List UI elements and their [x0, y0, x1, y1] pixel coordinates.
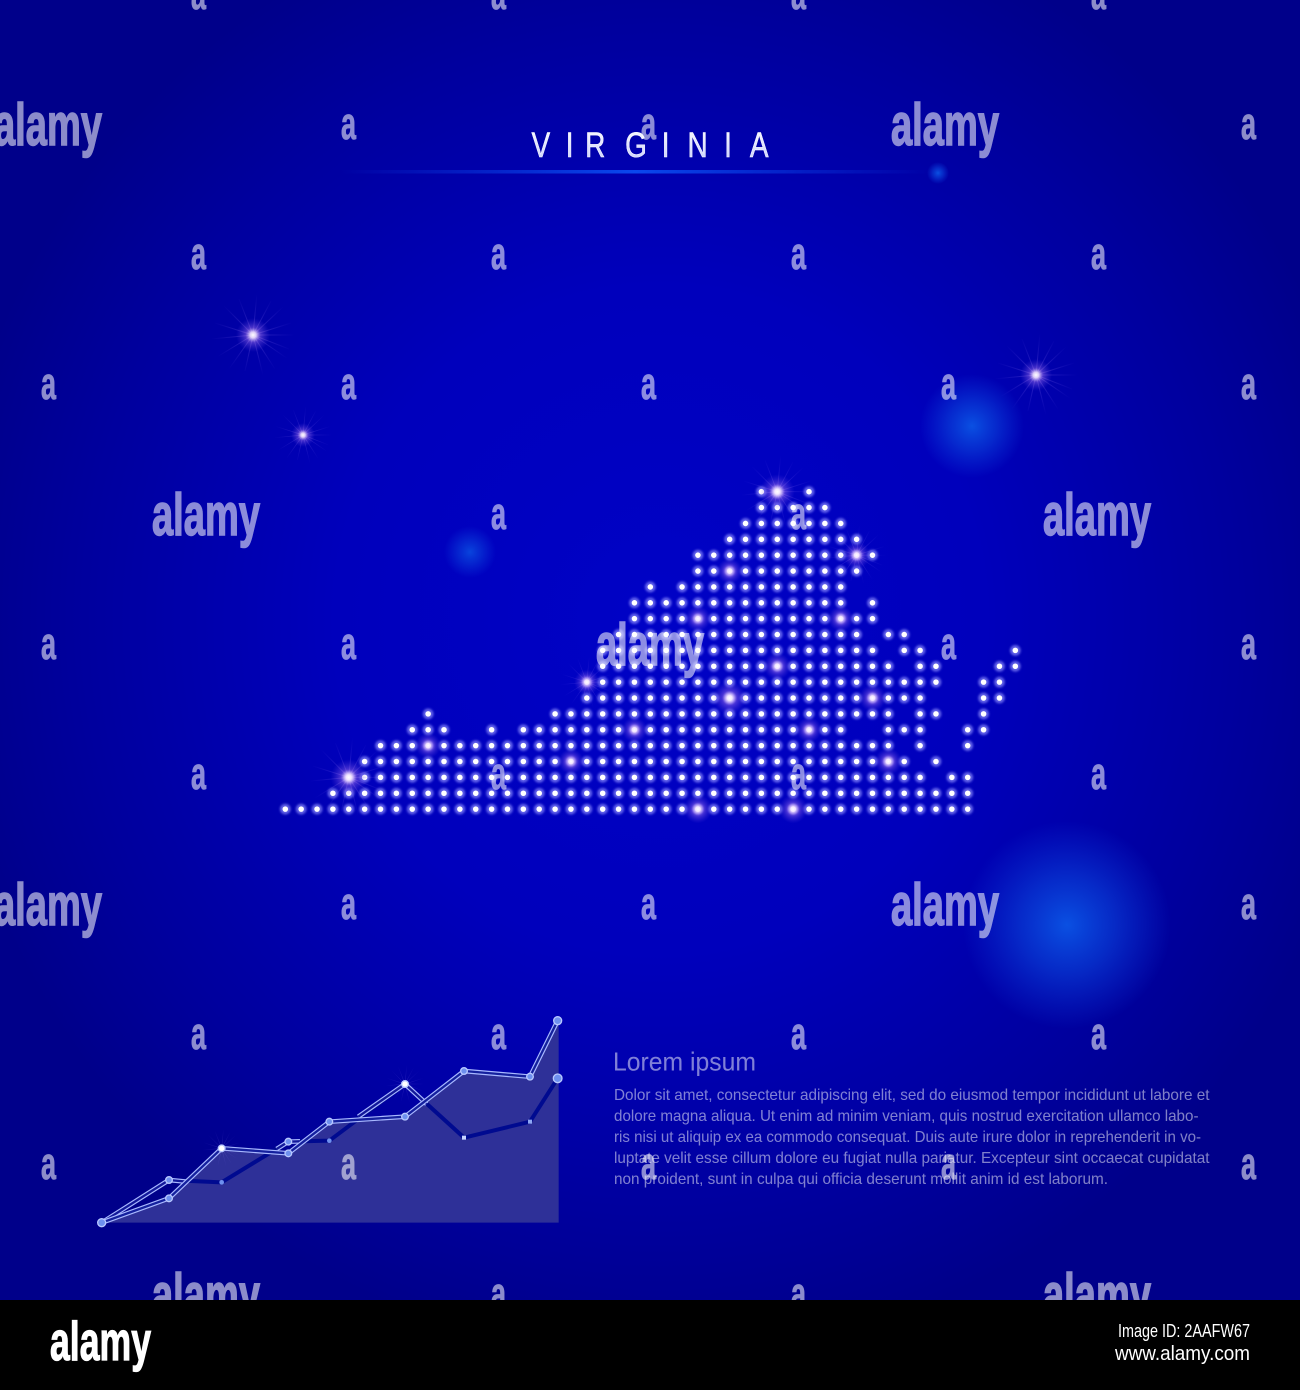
- paragraph: dolore magna aliqua. Ut enim ad minim veniam, quis nostrud exercitation ullamco labo-: [614, 1108, 1198, 1125]
- watermark pattern: a: [1091, 228, 1107, 279]
- watermark pattern: alamy: [891, 872, 999, 938]
- watermark pattern: a: [791, 488, 807, 539]
- paragraph: ris nisi ut aliquip ex ea commodo consequat. Duis aute irure dolor in reprehenderit in vo-: [614, 1129, 1201, 1146]
- watermark pattern: a: [1091, 748, 1107, 799]
- watermark pattern: a: [41, 358, 57, 409]
- dotted map of Virginia: [285, 455, 1015, 823]
- watermark pattern: a: [191, 1008, 207, 1059]
- footer bar: [0, 1300, 1300, 1390]
- watermark pattern: a: [41, 618, 57, 669]
- watermark pattern: a: [341, 878, 357, 929]
- area under the top line: [102, 1021, 559, 1223]
- title: Virginia: VIRGINIA: [531, 125, 769, 165]
- highlighted segments of dark line: [102, 1084, 427, 1223]
- watermark pattern: a: [941, 358, 957, 409]
- watermark pattern: a: [641, 98, 657, 149]
- upper double line: [102, 1021, 558, 1223]
- image id: Image ID: 2AAFW67: [1118, 1321, 1250, 1341]
- star sparkles: [211, 293, 1078, 463]
- watermark pattern: a: [941, 618, 957, 669]
- website: www.alamy.com: [1114, 1343, 1250, 1365]
- paragraph: non proident, sunt in culpa qui officia deserunt mollit anim id est laborum.: [614, 1171, 1108, 1188]
- title underline beam: [340, 162, 949, 184]
- watermark pattern: alamy: [152, 482, 260, 548]
- watermark pattern: a: [341, 618, 357, 669]
- watermark pattern: a: [641, 1138, 657, 1189]
- watermark pattern: a: [1241, 358, 1257, 409]
- watermark pattern: alamy: [152, 1262, 260, 1328]
- watermark pattern: a: [1241, 878, 1257, 929]
- watermark pattern: a: [491, 1008, 507, 1059]
- watermark pattern: alamy: [1043, 482, 1151, 548]
- watermark pattern: a: [1091, 1008, 1107, 1059]
- chart nodes: [98, 1017, 562, 1227]
- watermark pattern: a: [791, 228, 807, 279]
- text block: Lorem ipsum: [613, 1046, 1210, 1188]
- watermark pattern: a: [491, 488, 507, 539]
- paragraph: luptate velit esse cillum dolore eu fugiat nulla pariatur. Excepteur sint occaecat cupidatat: [614, 1150, 1210, 1167]
- watermark pattern: a: [191, 228, 207, 279]
- watermark pattern: a: [191, 748, 207, 799]
- watermark pattern: a: [791, 1008, 807, 1059]
- footer logo: alamy: [50, 1310, 151, 1372]
- line and area chart: [98, 1017, 562, 1227]
- glowing blue spots: [444, 374, 1171, 1029]
- watermark pattern: a: [341, 98, 357, 149]
- heading: Lorem ipsum: [613, 1046, 756, 1076]
- watermark pattern: a: [491, 228, 507, 279]
- watermark pattern: a: [341, 358, 357, 409]
- watermark pattern: alamy: [596, 612, 704, 678]
- paragraph: Dolor sit amet, consectetur adipiscing elit, sed do eiusmod tempor incididunt ut labore et: [614, 1087, 1210, 1104]
- paragraph: [614, 1087, 1210, 1188]
- watermark pattern: a: [641, 358, 657, 409]
- chart glow points: [202, 1064, 425, 1167]
- watermark pattern: alamy: [1043, 1262, 1151, 1328]
- watermark pattern: a: [1241, 618, 1257, 669]
- watermark pattern: a: [1241, 1138, 1257, 1189]
- watermark pattern: a: [791, 748, 807, 799]
- watermark pattern: a: [641, 878, 657, 929]
- watermark pattern: a: [491, 1268, 507, 1319]
- watermark pattern: a: [791, 1268, 807, 1319]
- watermark pattern: a: [941, 1138, 957, 1189]
- bright city lights on the map: [309, 455, 902, 823]
- dark data line: [102, 1078, 558, 1223]
- watermark pattern: a: [1241, 98, 1257, 149]
- watermark pattern: a: [41, 1138, 57, 1189]
- watermark pattern: a: [491, 748, 507, 799]
- watermark pattern: a: [341, 1138, 357, 1189]
- watermark pattern: alamy: [891, 92, 999, 158]
